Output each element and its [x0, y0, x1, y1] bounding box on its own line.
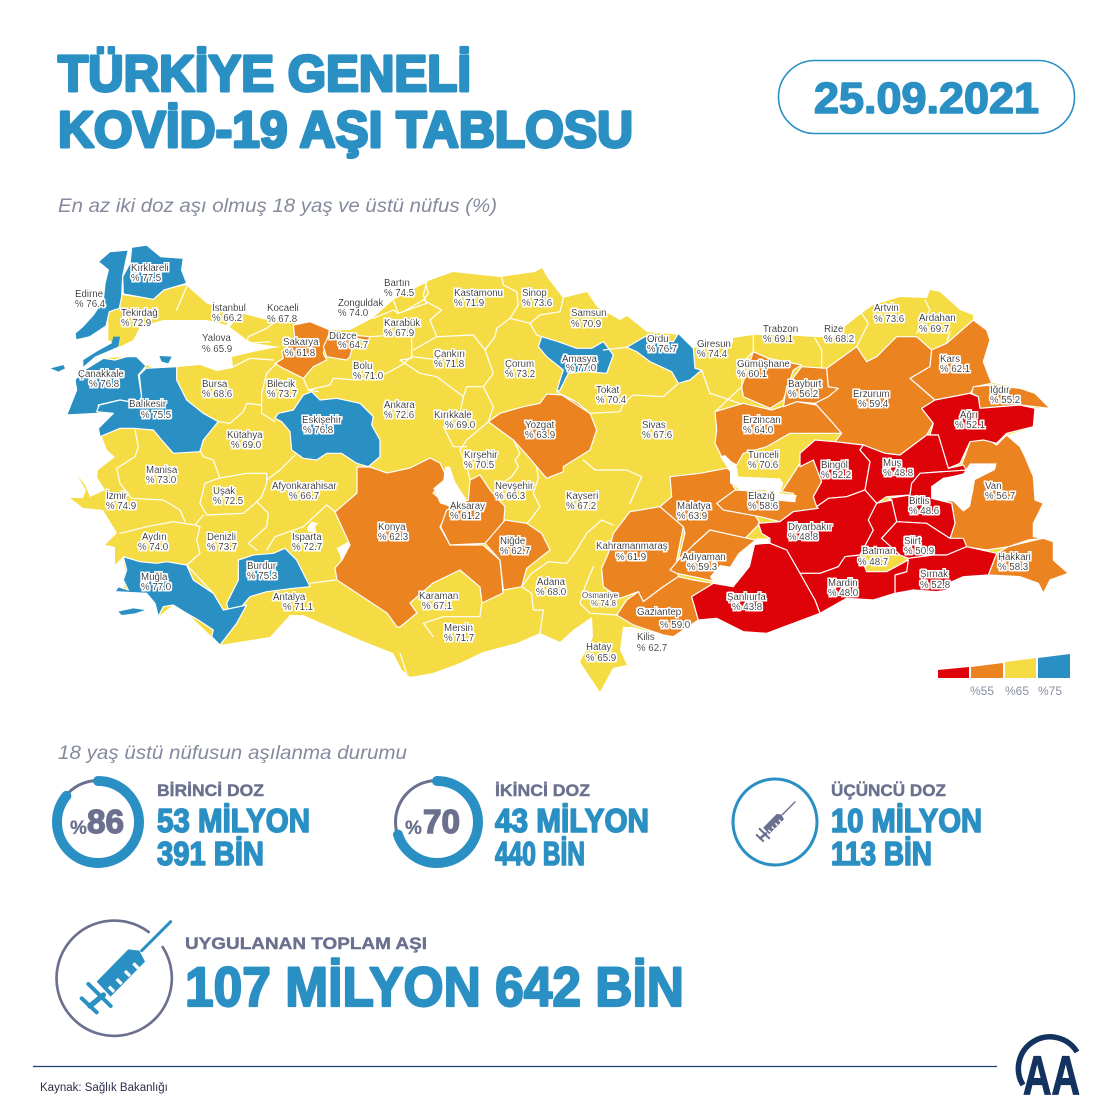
- label: Muş: Muş: [883, 458, 901, 469]
- label: Sivas: % 67.6: [642, 430, 672, 441]
- label: Amasya: % 77.0: [566, 363, 597, 374]
- lake: Beyşehir: [337, 542, 358, 568]
- province: Ordu: [627, 333, 702, 383]
- label: Diyarbakır: Diyarbakır: [788, 522, 832, 533]
- label: Hatay: Hatay: [586, 642, 611, 653]
- label: Ardahan: Ardahan: [919, 313, 956, 324]
- label: Sakarya: Sakarya: [283, 337, 319, 348]
- label: Gaziantep: Gaziantep: [637, 607, 681, 618]
- island: Rhodes: [118, 608, 145, 615]
- lake: Van: [932, 463, 997, 512]
- label: Ağrı: % 52.1: [955, 420, 985, 431]
- province: Gaziantep: [617, 577, 713, 637]
- label: Tunceli: % 70.6: [748, 460, 778, 471]
- province: Kahramanmaraş: [602, 507, 683, 602]
- stats subtitle: 18 yaş üstü nüfusun aşılanma durumu: [58, 743, 407, 764]
- province labels: [75, 263, 1031, 664]
- label: Adıyaman: Adıyaman: [682, 552, 726, 563]
- label: Elazığ: Elazığ: [748, 491, 775, 502]
- label: Niğde: % 62.7: [500, 546, 530, 557]
- label: Manisa: % 73.0: [146, 475, 177, 486]
- label: Kayseri: % 67.2: [566, 501, 596, 512]
- total doses: [57, 921, 684, 1036]
- label: Nevşehir: % 66.3: [495, 491, 525, 502]
- province: Kırklareli: [123, 245, 187, 299]
- label: Niğde: Niğde: [500, 536, 525, 547]
- label: Çorum: Çorum: [505, 359, 534, 370]
- label: Aydın: Aydın: [142, 532, 167, 543]
- label: Mersin: % 71.7: [444, 633, 474, 644]
- donut: 86 percent: %: [70, 818, 87, 839]
- label: Bartın: % 74.5: [384, 288, 414, 299]
- label: Van: % 56.7: [985, 491, 1015, 502]
- label: Aydın: % 74.0: [138, 542, 169, 553]
- label: İstanbul: % 66.2: [212, 313, 242, 324]
- province: Hakkari: [988, 538, 1068, 593]
- label: Nevşehir: Nevşehir: [495, 481, 533, 492]
- label: Kilis: Kilis: [637, 632, 655, 643]
- legend: %65: [1005, 684, 1029, 698]
- label: Kocaeli: Kocaeli: [267, 303, 299, 314]
- label: Tokat: % 70.4: [596, 395, 627, 406]
- label: Iğdır: Iğdır: [990, 385, 1009, 396]
- label: Hatay: % 65.9: [586, 653, 616, 664]
- label: Eskişehir: Eskişehir: [302, 415, 341, 426]
- label: Şanlıurfa: Şanlıurfa: [727, 592, 766, 603]
- label: Yalova: Yalova: [202, 333, 231, 344]
- label: Muğla: Muğla: [141, 572, 167, 583]
- province: Muş: [860, 435, 968, 503]
- label: Bayburt: Bayburt: [788, 379, 821, 390]
- footer rule: [33, 1066, 997, 1068]
- lake: Atatürk: [710, 538, 770, 587]
- label: Ankara: Ankara: [384, 400, 415, 411]
- province: Kars: [910, 320, 992, 400]
- logo: AA: AA: [1023, 1044, 1080, 1106]
- label: Karabük: % 67.9: [384, 328, 414, 339]
- province: Gelibolu: [83, 337, 120, 367]
- date badge: [778, 60, 1074, 134]
- province: Van: [933, 435, 1043, 550]
- province: Sakarya: [275, 322, 330, 378]
- label: Antalya: Antalya: [273, 592, 305, 603]
- label: Zonguldak: Zonguldak: [338, 298, 383, 309]
- donut: 86 percent: 86: [87, 803, 124, 840]
- text: birinci doz: 391 BİN: [157, 835, 264, 872]
- label: Tekirdağ: % 72.9: [121, 318, 151, 329]
- label: Ardahan: % 69.7: [919, 324, 949, 335]
- label: Giresun: Giresun: [697, 339, 731, 350]
- lake: Keban: [720, 455, 797, 502]
- province: Malatya: [660, 468, 760, 560]
- label: Mersin: Mersin: [444, 623, 473, 634]
- map subtitle: En az iki doz aşı olmuş 18 yaş ve üstü nüfus (%): [58, 196, 497, 217]
- label: Şırnak: % 52.8: [920, 580, 950, 591]
- label: Samsun: Samsun: [571, 308, 607, 319]
- province: Yozgat: [488, 394, 597, 478]
- label: Erzurum: Erzurum: [853, 389, 890, 400]
- logo: AA: [1018, 1037, 1080, 1106]
- label: Balıkesir: % 75.5: [141, 410, 171, 421]
- label: Şanlıurfa: % 43.8: [732, 602, 762, 613]
- label: Konya: Konya: [378, 522, 405, 533]
- label: Bolu: % 71.0: [353, 371, 384, 382]
- label: Sivas: Sivas: [642, 420, 666, 431]
- donut: 70 percent: 70: [423, 803, 460, 840]
- province: Tekirdağ and İstanbul Europe: [108, 285, 230, 347]
- label: Rize: Rize: [824, 324, 843, 335]
- label: Iğdır: % 55.2: [990, 395, 1020, 406]
- label: Gümüşhane: % 60.1: [737, 369, 767, 380]
- label: Çorum: % 73.2: [505, 369, 535, 380]
- label: Afyonkarahisar: Afyonkarahisar: [272, 481, 337, 492]
- label: Çankırı: % 71.8: [434, 359, 464, 370]
- text: üçüncü doz: 10 MİLYON: [831, 802, 982, 839]
- label: Giresun: % 74.4: [697, 349, 728, 360]
- label: Artvin: Artvin: [874, 303, 899, 314]
- province: Niğde: [485, 520, 550, 590]
- label: Erzincan: % 64.0: [743, 425, 774, 436]
- label: Ordu: Ordu: [647, 334, 669, 345]
- label: Eskişehir: % 76.8: [303, 425, 333, 436]
- label: Edirne: Edirne: [75, 289, 103, 300]
- province: Muğla: [115, 557, 247, 645]
- province: Amasya: [538, 337, 613, 392]
- label: Malatya: Malatya: [677, 501, 711, 512]
- text: üçüncü doz: [831, 781, 982, 872]
- legend: %55: [970, 684, 994, 698]
- label: Ankara: % 72.6: [384, 410, 414, 421]
- province: Mardin: [800, 555, 908, 613]
- label: Siirt: % 50.9: [904, 546, 934, 557]
- label: Kırşehir: Kırşehir: [464, 450, 497, 461]
- label: Çanakkale: Çanakkale: [78, 369, 124, 380]
- label: Balıkesir: Balıkesir: [129, 399, 166, 410]
- label: Aksaray: % 61.2: [450, 511, 480, 522]
- icon: small syringe in ring: [733, 779, 817, 865]
- stat: birinci doz: [56, 780, 310, 872]
- province: Elazığ: [717, 460, 822, 522]
- label: İstanbul: İstanbul: [212, 303, 246, 314]
- legend: %75: [1038, 684, 1062, 698]
- Anatolia base silhouette: [67, 268, 1068, 692]
- label: Kilis: % 62.7: [637, 643, 667, 654]
- label: Muş: % 48.8: [883, 468, 913, 479]
- label: Artvin: % 73.6: [874, 314, 904, 325]
- stat: ikinci doz: [396, 780, 649, 872]
- label: İzmir: İzmir: [106, 491, 127, 502]
- label: Bartın: Bartın: [384, 278, 410, 289]
- label: Samsun: % 70.9: [571, 319, 601, 330]
- label: Konya: % 62.3: [378, 532, 408, 543]
- label: Uşak: Uşak: [213, 486, 235, 497]
- label: Bitlis: Bitlis: [909, 496, 929, 507]
- province: Düzce: [323, 332, 370, 360]
- label: Yozgat: % 63.9: [525, 430, 555, 441]
- lake: Tuz: [433, 467, 467, 507]
- label: Kütahya: % 69.0: [231, 440, 262, 451]
- province: Iğdır: [972, 385, 1050, 408]
- province: Bayburt: [783, 367, 838, 407]
- label: Malatya: % 63.9: [677, 511, 707, 522]
- label: Mardin: % 48.0: [828, 588, 859, 599]
- island: Gökçeada: [51, 365, 65, 372]
- source: Kaynak: Sağlık Bakanlığı: [40, 1082, 168, 1094]
- text: üçüncü doz: ÜÇÜNCÜ DOZ: [831, 781, 946, 800]
- province: Erzincan: [715, 402, 842, 465]
- label: Kars: Kars: [940, 354, 960, 365]
- province: Gümüşhane: [742, 352, 802, 408]
- label: Adana: Adana: [537, 577, 565, 588]
- label: Tokat: Tokat: [596, 385, 619, 396]
- province: Adıyaman: [670, 530, 783, 583]
- province: Konya: [335, 458, 503, 627]
- eastern provinces: [692, 300, 1068, 633]
- label: Karaman: % 67.1: [422, 601, 452, 612]
- province: Şırnak: [895, 547, 997, 593]
- label: Rize: % 68.2: [824, 334, 854, 345]
- label: Isparta: % 72.7: [292, 542, 322, 553]
- label: Kırşehir: % 70.5: [464, 460, 494, 471]
- province: Siirt: [882, 522, 967, 558]
- label: Afyonkarahisar: % 66.7: [289, 491, 319, 502]
- label: Mardin: Mardin: [828, 578, 858, 589]
- label: Bolu: Bolu: [353, 361, 372, 372]
- label: Zonguldak: % 74.0: [338, 308, 369, 319]
- label: Tunceli: Tunceli: [748, 450, 779, 461]
- label: Elazığ: % 58.6: [748, 501, 778, 512]
- label: Diyarbakır: % 48.8: [788, 532, 818, 543]
- label: Bilecik: % 73.7: [267, 389, 297, 400]
- province: Bingöl: [800, 440, 870, 507]
- label: Adıyaman: % 59.3: [687, 562, 717, 573]
- label: Bitlis: % 48.6: [909, 506, 939, 517]
- province: Burdur: [227, 548, 310, 610]
- label: Bursa: Bursa: [202, 379, 227, 390]
- text: birinci doz: 53 MİLYON: [157, 802, 310, 839]
- text: birinci doz: BİRİNCİ DOZ: [157, 782, 264, 800]
- label: Bingöl: Bingöl: [821, 460, 848, 471]
- title: TÜRKİYE GENELİ: [58, 45, 471, 102]
- label: Sinop: Sinop: [522, 288, 547, 299]
- text: üçüncü doz: 113 BİN: [831, 835, 932, 872]
- label: Bursa: % 68.6: [202, 389, 232, 400]
- donut: 86 percent: [56, 780, 140, 864]
- label: Şırnak: Şırnak: [920, 569, 948, 580]
- label: Muğla: % 77.0: [141, 582, 172, 593]
- label: Erzincan: Erzincan: [743, 415, 781, 426]
- province: Edirne: [75, 250, 128, 340]
- province: Şanlıurfa: [692, 543, 820, 633]
- island: Marmara: [159, 356, 172, 363]
- title: KOVİD-19 AŞI TABLOSU: [58, 101, 633, 158]
- label: Bilecik: Bilecik: [267, 379, 295, 390]
- province: Erzurum: [815, 337, 935, 455]
- central provinces: [400, 277, 783, 673]
- label: Kırıkkale: Kırıkkale: [434, 410, 472, 421]
- label: Kütahya: Kütahya: [227, 430, 263, 441]
- label: Adana: % 68.0: [536, 587, 567, 598]
- label: Kahramanmaraş: Kahramanmaraş: [596, 541, 668, 552]
- date badge: 25.09.2021: [814, 74, 1039, 123]
- label: Gaziantep: % 59.0: [660, 620, 691, 631]
- province: Batman: [860, 500, 900, 555]
- label: İzmir: % 74.9: [106, 501, 136, 512]
- label: Kastamonu: % 71.9: [454, 298, 484, 309]
- label: Siirt: Siirt: [904, 536, 921, 547]
- west provinces: [51, 245, 440, 645]
- label: Çankırı: Çankırı: [434, 349, 465, 360]
- label: Uşak: % 72.5: [213, 496, 243, 507]
- label: Tekirdağ: Tekirdağ: [121, 308, 158, 319]
- text: ikinci doz: İKİNCİ DOZ: [495, 782, 590, 800]
- label: Kırklareli: % 77.5: [131, 273, 161, 284]
- label: Kocaeli: % 67.8: [267, 314, 297, 325]
- map of Turkey: [51, 245, 1068, 692]
- stat: üçüncü doz: [733, 779, 982, 872]
- label: Gümüşhane: Gümüşhane: [737, 359, 790, 370]
- label: Bingöl: % 52.2: [821, 470, 851, 481]
- province: Eskişehir: [275, 392, 380, 467]
- lake: Eğirdir: [307, 522, 318, 533]
- label: Hakkari: % 58.3: [998, 562, 1028, 573]
- label: Sinop: % 73.6: [522, 298, 552, 309]
- icon: large syringe in ring: [57, 921, 172, 1036]
- label: Denizli: % 73.7: [207, 542, 237, 553]
- label: Denizli: Denizli: [207, 532, 236, 543]
- label: Kars: % 62.1: [940, 364, 970, 375]
- text: total value: 107 MİLYON 642 BİN: [185, 955, 684, 1018]
- province: Diyarbakır: [758, 490, 877, 573]
- label: Erzurum: % 59.4: [858, 399, 889, 410]
- province: Çanakkale: [67, 357, 146, 415]
- label: Trabzon: % 69.1: [763, 334, 793, 345]
- label: Antalya: % 71.1: [283, 602, 313, 613]
- label: Ağrı: Ağrı: [960, 410, 978, 421]
- text: ikinci doz: 43 MİLYON: [495, 802, 649, 839]
- label: Aksaray: Aksaray: [450, 501, 485, 512]
- label: Karabük: Karabük: [384, 318, 420, 329]
- label: Düzce: Düzce: [329, 331, 356, 342]
- label: Sakarya: % 61.8: [285, 348, 315, 359]
- label: Trabzon: Trabzon: [763, 324, 798, 335]
- label: Osmaniye: % 74.8: [591, 599, 616, 608]
- label: Burdur: % 75.3: [247, 571, 277, 582]
- label: Kırıkkale: % 69.0: [445, 420, 476, 431]
- label: Edirne: % 76.4: [75, 299, 106, 310]
- legend: [938, 654, 1070, 698]
- label: Van: Van: [985, 481, 1002, 492]
- label: Yalova: % 65.9: [202, 344, 232, 355]
- label: Burdur: Burdur: [247, 561, 276, 572]
- label: Yozgat: Yozgat: [525, 420, 554, 431]
- province: Bitlis: [888, 470, 968, 538]
- text: ikinci doz: 440 BİN: [495, 835, 585, 872]
- province: Ağrı: [922, 393, 1035, 468]
- label: Ordu: % 76.7: [647, 344, 677, 355]
- text: total label: UYGULANAN TOPLAM AŞI: [185, 934, 427, 953]
- label: Batman: % 48.7: [858, 557, 888, 568]
- label: Kayseri: Kayseri: [566, 491, 598, 502]
- text: ikinci doz: [495, 782, 649, 872]
- label: Amasya: Amasya: [562, 354, 597, 365]
- label: Çanakkale: % 76.8: [89, 379, 119, 390]
- label: Kastamonu: Kastamonu: [454, 288, 503, 299]
- label: Kırklareli: Kırklareli: [131, 263, 169, 274]
- donut: 70 percent: %: [405, 818, 422, 839]
- label: Batman: Batman: [862, 546, 895, 557]
- label: Kahramanmaraş: % 61.9: [616, 552, 646, 563]
- province: Aksaray: [441, 475, 505, 545]
- label: Düzce: % 64.7: [338, 340, 368, 351]
- label: Isparta: Isparta: [292, 532, 322, 543]
- text: birinci doz: [157, 782, 310, 872]
- label: Osmaniye: Osmaniye: [582, 591, 618, 600]
- title: [58, 45, 633, 158]
- label: Karaman: Karaman: [419, 591, 458, 602]
- label: Manisa: Manisa: [146, 465, 177, 476]
- province: Balıkesir: [97, 367, 218, 453]
- label: Bayburt: % 56.2: [788, 389, 818, 400]
- label: Hakkari: Hakkari: [998, 552, 1031, 563]
- donut: 70 percent: [396, 780, 478, 864]
